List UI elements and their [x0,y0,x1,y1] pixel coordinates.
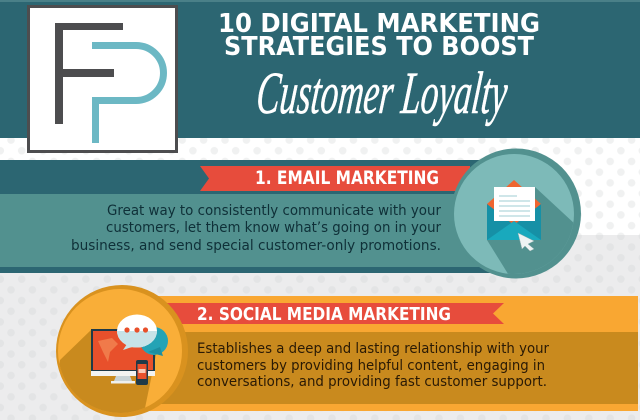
icon: monitor and chat badge [50,285,188,420]
email description text: customers, let them know what’s going on in your [106,220,441,236]
email description text: Great way to consistently communicate with your [107,203,441,219]
social description text [197,341,549,390]
social description text: customers by providing helpful content, engaging in [197,358,545,374]
title: STRATEGIES TO BOOST [224,32,535,62]
logo [28,6,176,152]
title [218,9,540,127]
logo letter F [55,23,123,124]
email ribbon heading [200,166,470,191]
social description text: conversations, and providing fast customer support. [197,374,547,390]
chat bubbles [140,327,168,355]
panel: social media marketing [50,285,638,420]
phone [136,360,148,385]
panel: email marketing [0,148,581,290]
icon: email envelope badge [454,148,581,278]
email description text: business, and send special customer-only promotions. [71,238,441,254]
social ribbon heading: 2. SOCIAL MEDIA MARKETING [197,304,451,325]
title: 10 DIGITAL MARKETING [218,9,540,39]
email panel band [0,160,490,273]
monitor [91,329,155,371]
email description text [71,203,441,254]
social description text: Establishes a deep and lasting relationship with your [197,341,549,357]
header band [0,0,640,138]
logo letter P [92,46,163,143]
social panel band [100,296,638,411]
email ribbon heading: 1. EMAIL MARKETING [255,168,439,189]
